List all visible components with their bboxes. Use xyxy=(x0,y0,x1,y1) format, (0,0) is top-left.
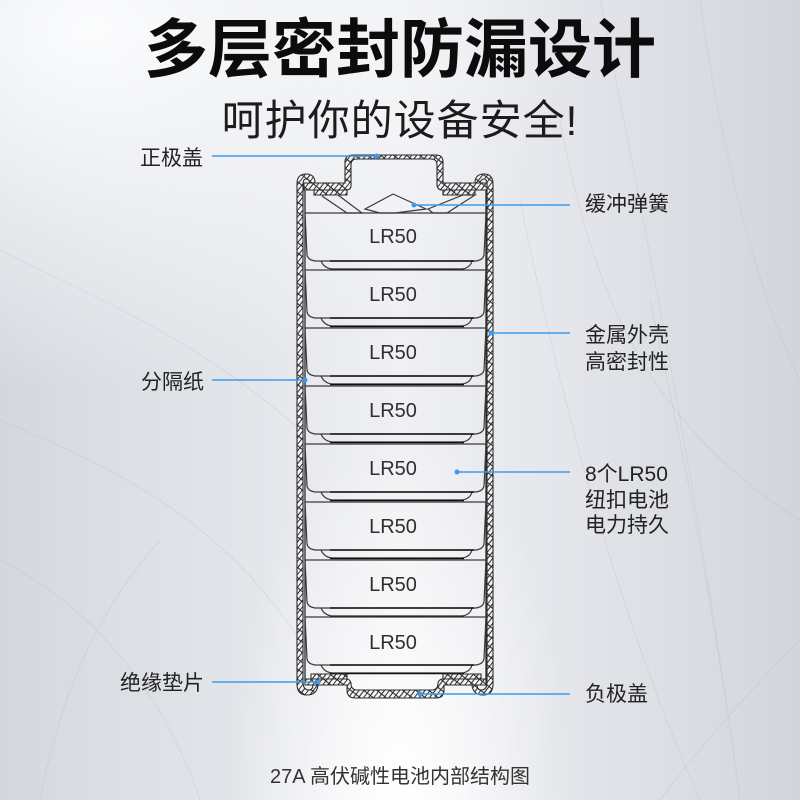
label: separator paper: 分隔纸 xyxy=(141,371,204,394)
LR50 labels: LR50 xyxy=(369,574,417,596)
LR50 labels xyxy=(369,226,417,654)
LR50 cells xyxy=(305,213,486,674)
label: metal shell xyxy=(585,324,669,374)
LR50 labels: LR50 xyxy=(369,284,417,306)
callout leader lines xyxy=(212,154,570,696)
label: 8 LR50 cells: 电力持久 xyxy=(585,514,669,537)
label: 8 LR50 cells: 纽扣电池 xyxy=(585,488,669,512)
caption: 27A 高伏碱性电池内部结构图 xyxy=(270,766,530,788)
title: 多层密封防漏设计 xyxy=(144,14,656,86)
LR50 labels: LR50 xyxy=(369,400,417,422)
label: negative cap: 负极盖 xyxy=(585,683,648,706)
negative cap xyxy=(305,674,486,698)
LR50 labels: LR50 xyxy=(369,516,417,538)
LR50 labels: LR50 xyxy=(369,342,417,364)
positive cap xyxy=(304,155,487,195)
label: buffer spring: 缓冲弹簧 xyxy=(585,193,669,216)
LR50 labels: LR50 xyxy=(369,458,417,480)
label: metal shell: 金属外壳 xyxy=(585,324,669,347)
label: 8 LR50 cells: 8个LR50 xyxy=(585,463,668,486)
subtitle: 呵护你的设备安全! xyxy=(222,97,578,144)
label: 8 LR50 cells xyxy=(585,463,669,537)
label: positive cap: 正极盖 xyxy=(140,147,203,170)
label: insulating gasket: 绝缘垫片 xyxy=(120,672,204,695)
label: metal shell: 高密封性 xyxy=(585,351,669,374)
LR50 labels: LR50 xyxy=(369,226,417,248)
metal outer shell xyxy=(297,174,493,695)
LR50 labels: LR50 xyxy=(369,632,417,654)
separator paper lines xyxy=(305,190,486,680)
buffer spring xyxy=(322,194,475,213)
